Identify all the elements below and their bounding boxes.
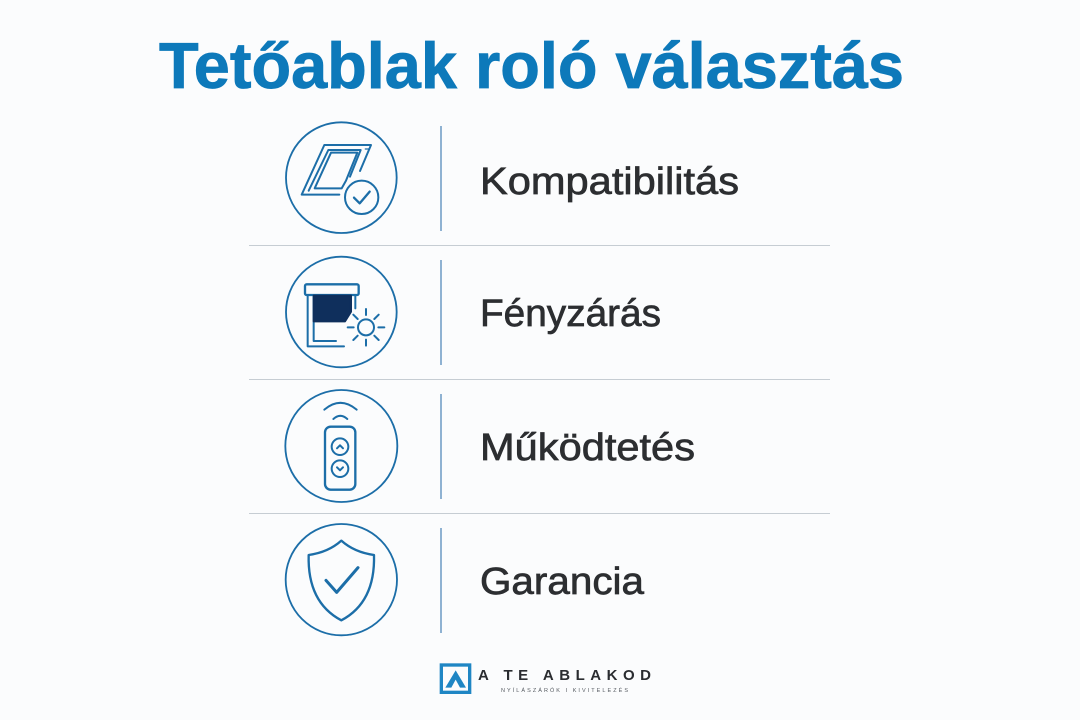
- logo mark: [441, 665, 470, 692]
- label: Működtetés: [480, 427, 695, 469]
- divider: [440, 394, 442, 499]
- row: Működtetés: [285, 390, 695, 502]
- row: Garancia: [286, 524, 645, 635]
- label: Fényzárás: [480, 293, 661, 335]
- logo name: A TE ABLAKOD: [478, 667, 651, 684]
- logo tagline: NYÍLÁSZÁRÓK I KIVITELEZÉS: [501, 687, 628, 694]
- icon: blind and sun: [286, 257, 397, 367]
- divider: [440, 528, 442, 633]
- icon: roof window with check: [286, 122, 397, 233]
- title: Tetőablak roló választás: [159, 29, 904, 102]
- icon: remote control: [285, 390, 397, 502]
- icon: shield with check: [286, 524, 397, 635]
- label: Kompatibilitás: [480, 161, 739, 203]
- row: Kompatibilitás: [286, 122, 739, 233]
- logo: [441, 665, 651, 694]
- row: Fényzárás: [286, 257, 661, 367]
- divider: [440, 126, 442, 231]
- divider: [440, 260, 442, 365]
- label: Garancia: [480, 561, 645, 603]
